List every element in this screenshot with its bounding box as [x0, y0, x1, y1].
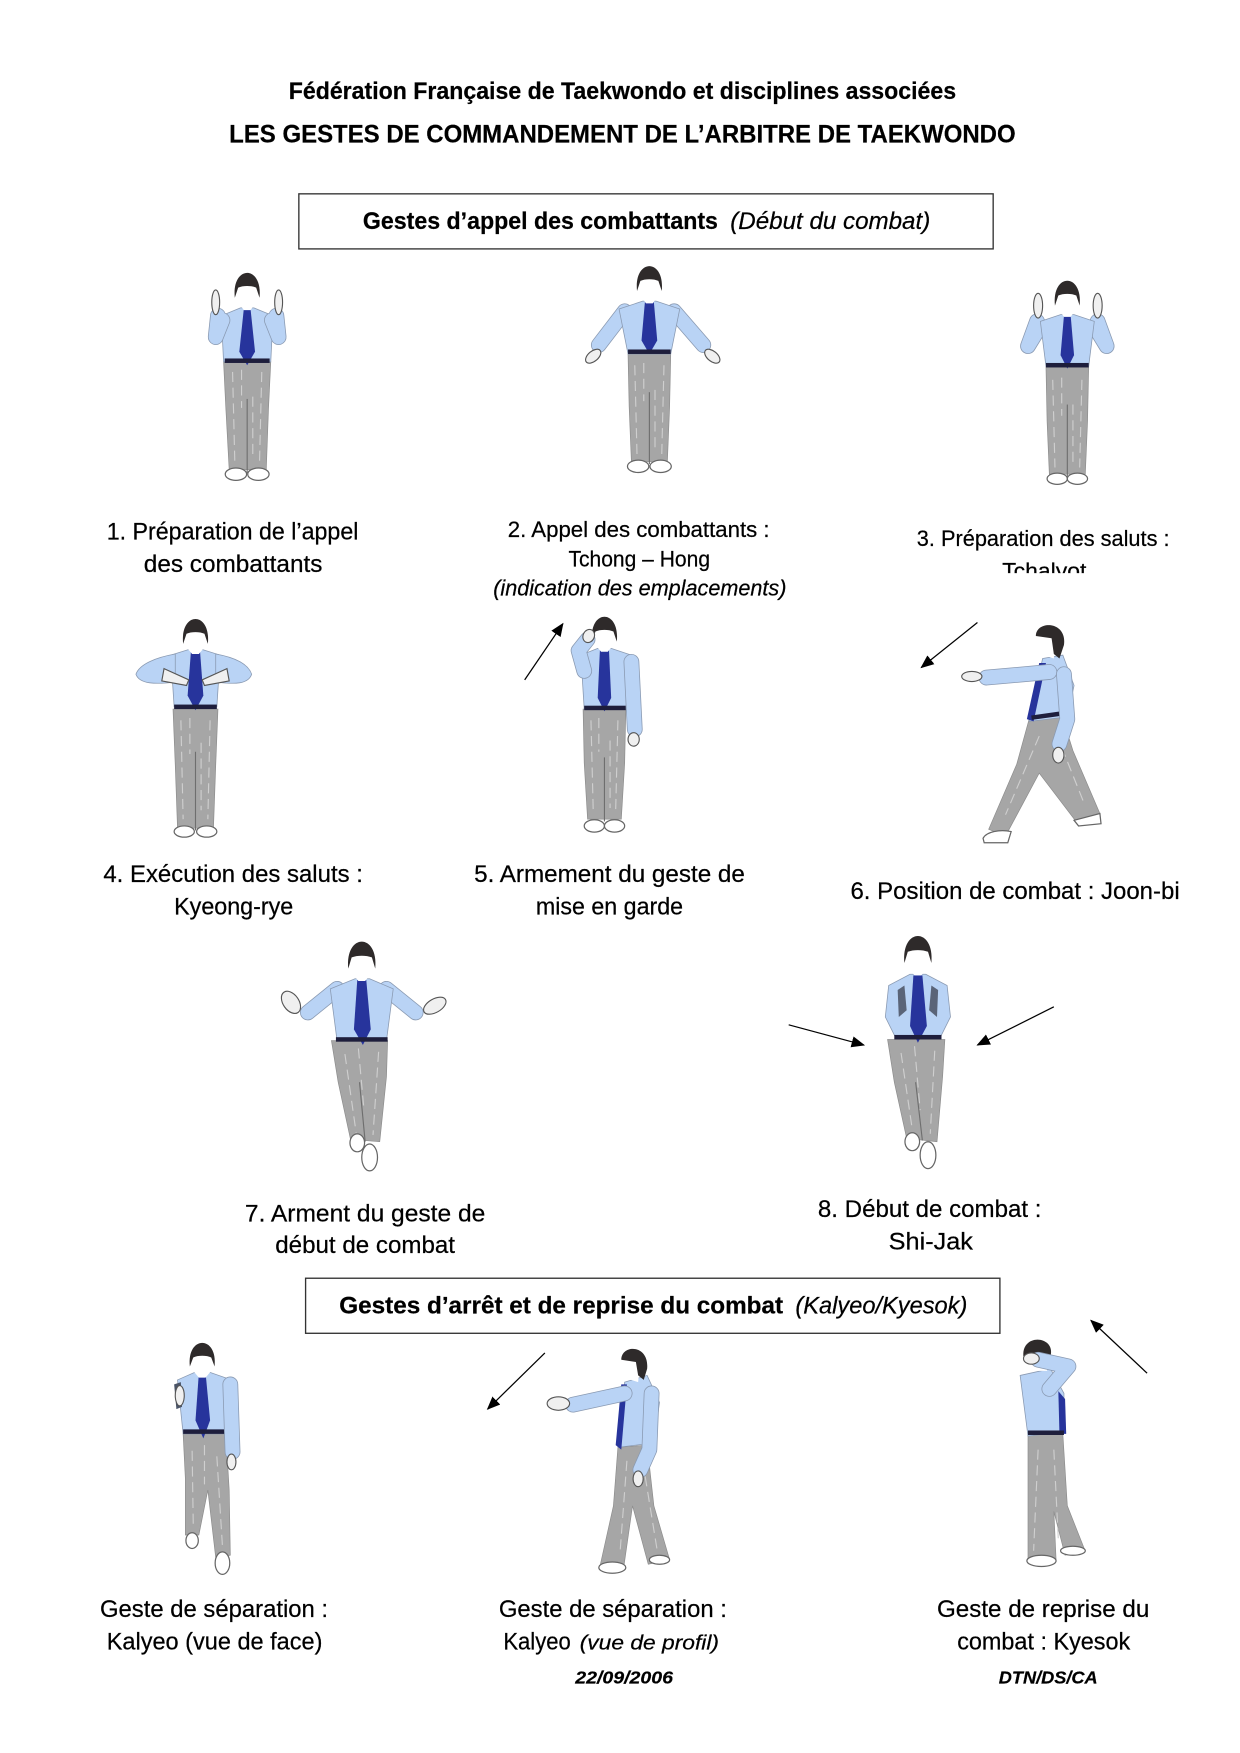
title: main heading: LES GESTES DE COMMANDEMENT DE L’ARBITRE DE TAEKWONDO	[229, 122, 1016, 149]
figure 3: preparation of the salutes	[1028, 281, 1107, 484]
panel: section heading stop and resume	[306, 1278, 1000, 1333]
caption 4: Kyeong-rye	[174, 894, 293, 920]
arrow figure 11	[1091, 1320, 1147, 1373]
caption separation profile: Geste de séparation :	[499, 1596, 727, 1622]
figure 9: separation front view	[174, 1343, 236, 1574]
caption separation profile: Kalyeo	[503, 1629, 571, 1655]
caption 1	[107, 518, 358, 577]
caption separation front	[100, 1596, 328, 1655]
figure 7: arming start of combat	[277, 942, 449, 1171]
panel: section heading start of combat	[299, 194, 993, 249]
caption 4	[103, 861, 363, 920]
caption 1: des combattants	[144, 551, 322, 577]
caption 6: 6. Position de combat : Joon-bi	[850, 878, 1180, 904]
panel: section heading start of combat: Gestes d’appel des combattants	[363, 208, 718, 234]
caption 8: 8. Début de combat :	[818, 1196, 1041, 1222]
caption 5: 5. Armement du geste de	[474, 861, 745, 887]
caption resume	[937, 1596, 1149, 1655]
arrow figure 6	[921, 623, 977, 667]
arrow figure 5	[525, 624, 563, 680]
figure 1: preparation of the call	[212, 273, 283, 480]
arrow figure 8 right	[977, 1007, 1054, 1045]
caption 2: Tchong – Hong	[568, 546, 710, 571]
caption resume: Geste de reprise du	[937, 1596, 1149, 1622]
caption 8	[818, 1196, 1041, 1255]
figure 6: combat position	[962, 625, 1101, 843]
arrow figure 8 left	[789, 1025, 864, 1045]
figure 4: execution of the salutes	[136, 619, 252, 837]
caption 3 (clipped second line): Tchalyot	[1002, 559, 1087, 584]
arrow figure 10	[488, 1353, 545, 1409]
caption separation profile	[499, 1596, 727, 1655]
caption resume: combat : Kyesok	[957, 1629, 1130, 1655]
footer date: 22/09/2006	[574, 1667, 674, 1687]
caption separation profile: (vue de profil)	[580, 1633, 719, 1655]
caption 2: 2. Appel des combattants :	[508, 517, 770, 542]
caption 5	[474, 861, 745, 920]
caption 8: Shi-Jak	[889, 1229, 973, 1255]
caption 1: 1. Préparation de l’appel	[107, 518, 358, 544]
title: federation: Fédération Française de Taekwondo et disciplines associées	[289, 78, 956, 104]
panel: section heading stop and resume: (Kalyeo/Kyesok)	[795, 1293, 967, 1319]
caption 3 (clipped second line)	[918, 529, 1168, 574]
caption 4: 4. Exécution des saluts :	[103, 861, 363, 887]
caption 2	[493, 517, 786, 601]
caption separation front: Kalyeo (vue de face)	[107, 1629, 322, 1655]
caption 7	[245, 1200, 485, 1258]
caption 2: (indication des emplacements)	[493, 576, 786, 601]
figure 2: call of the competitors	[583, 266, 722, 473]
figure 11: resume combat	[1020, 1340, 1085, 1566]
panel: section heading stop and resume: Gestes d’arrêt et de reprise du combat	[339, 1293, 783, 1319]
caption separation front: Geste de séparation :	[100, 1596, 328, 1622]
figure 10: separation profile view	[547, 1349, 670, 1573]
figure 5: guard gesture arming	[579, 617, 639, 832]
footer reference: DTN/DS/CA	[999, 1667, 1098, 1687]
panel: section heading start of combat: (Début du combat)	[730, 208, 930, 234]
caption 7: début de combat	[275, 1232, 455, 1258]
caption 5: mise en garde	[536, 894, 683, 920]
figure 8: start of combat	[885, 936, 950, 1169]
caption 3 (clipped second line): 3. Préparation des saluts :	[917, 526, 1170, 551]
caption 7: 7. Arment du geste de	[245, 1200, 485, 1226]
